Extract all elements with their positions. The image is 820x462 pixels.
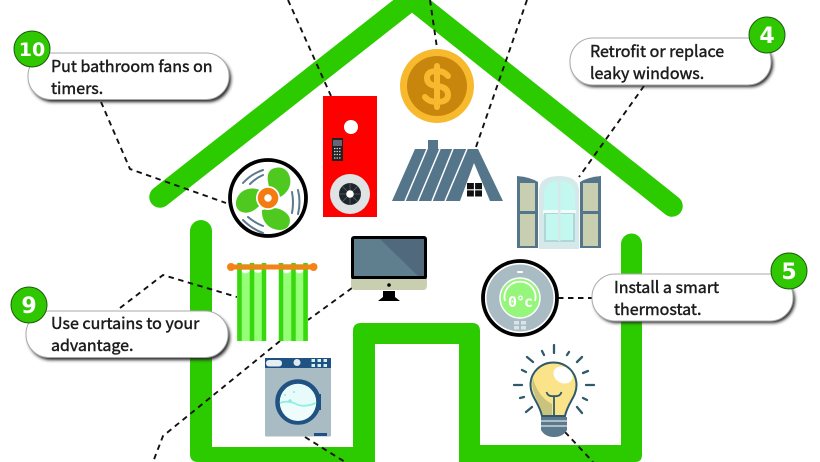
badge 5 [771, 253, 807, 289]
curtain rod [229, 264, 315, 270]
callout 9 [11, 287, 230, 360]
icon: roof [392, 140, 503, 201]
callout 10: 10 [19, 39, 45, 61]
callout 4: 4 [759, 24, 775, 49]
callout text: Put bathroom fans on [51, 53, 213, 77]
callout 9: 9 [21, 294, 37, 319]
roof [160, 0, 672, 206]
control panel [332, 138, 343, 161]
badge 9 [11, 287, 47, 323]
callout text: Use curtains to your [51, 310, 200, 334]
icon: red blower door [323, 96, 377, 217]
fan hub [256, 186, 280, 210]
walls and door [190, 220, 642, 462]
icon: curtains [227, 263, 318, 341]
icon: window with shutters [517, 176, 601, 249]
blower fan [330, 174, 370, 214]
fan blades [236, 168, 290, 230]
callout 5: 5 [781, 260, 797, 285]
badge 10 [14, 31, 50, 67]
callout text: Retrofit or replace [590, 38, 724, 62]
icon: fan [230, 160, 306, 236]
washer door [317, 394, 321, 410]
icon: smart thermostat: 0°c [508, 293, 532, 311]
callout text: Install a smart [614, 274, 719, 298]
callout 4 [570, 17, 785, 87]
callout 10 [14, 31, 231, 102]
right shutter [580, 176, 601, 248]
icon: light bulb [514, 345, 594, 437]
fan motion arcs [243, 170, 300, 233]
house outline [160, 0, 672, 462]
attic window [467, 183, 482, 196]
icon: smart thermostat [483, 261, 557, 335]
callout 5 [592, 253, 807, 323]
dashed connector lines [101, 0, 644, 462]
icon: washing machine [265, 358, 331, 436]
callout 5: thermostat. [614, 296, 701, 320]
light rays [514, 345, 594, 413]
badge 4 [749, 17, 785, 53]
icon: computer monitor [351, 236, 427, 301]
callout 4: leaky windows. [590, 60, 704, 84]
left shutter [517, 176, 538, 248]
callout 9: advantage. [51, 332, 133, 356]
icon: dollar coin [400, 49, 474, 123]
callout 10: timers. [51, 75, 103, 99]
